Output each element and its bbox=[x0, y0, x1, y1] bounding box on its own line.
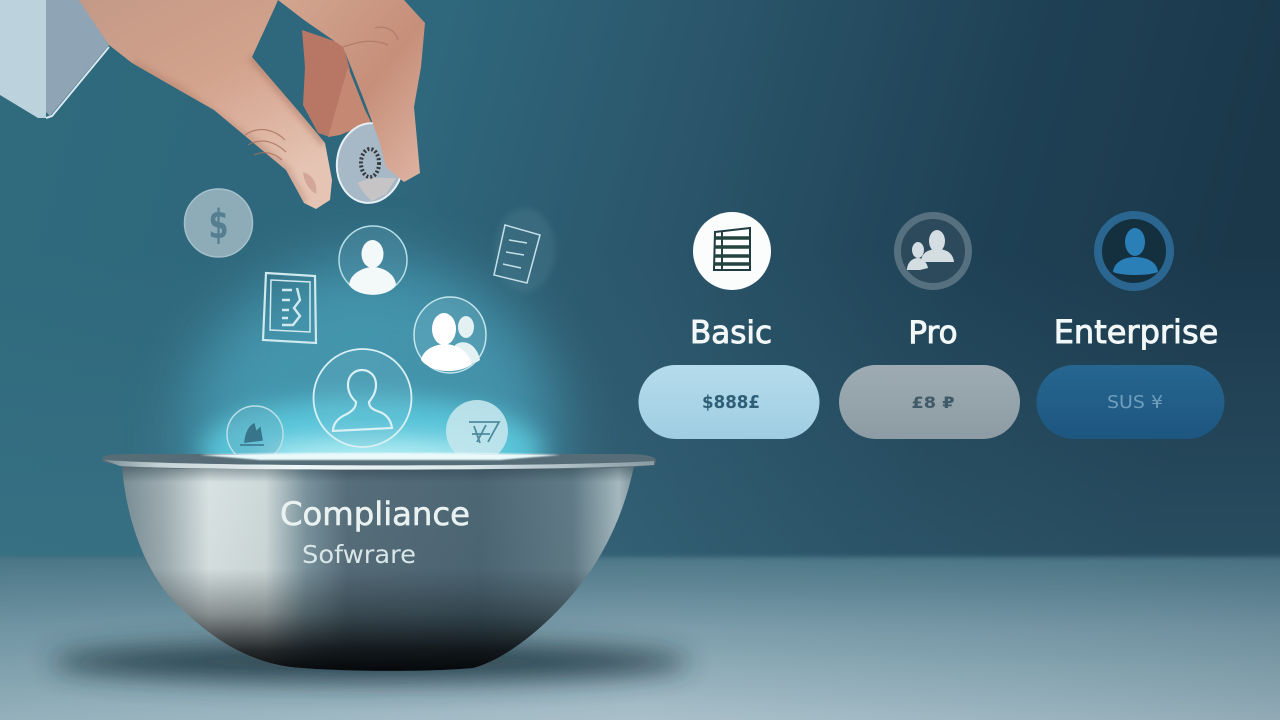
icon: large person outline in circle bbox=[314, 349, 412, 447]
icon: small filled circle, right bbox=[446, 400, 508, 454]
bowl label bbox=[280, 495, 470, 569]
heading: Enterprise: Enterprise bbox=[1054, 313, 1218, 351]
price pill: Basic: $888£ bbox=[702, 392, 760, 413]
back fingers bbox=[302, 30, 371, 137]
price pill: Pro bbox=[839, 365, 1020, 439]
index finger bbox=[278, 0, 425, 182]
icon: small circle, left bbox=[227, 406, 283, 462]
bowl label: Compliance bbox=[280, 495, 470, 533]
price pill: Enterprise: SUS ¥ bbox=[1107, 392, 1163, 413]
icon: white document badge bbox=[693, 212, 771, 290]
heading: Basic: Basic bbox=[690, 315, 772, 351]
bowl shadow on floor bbox=[50, 642, 690, 682]
price pill: Pro: £8 ₽ bbox=[912, 393, 954, 412]
light beam rising from the bowl bbox=[164, 237, 584, 454]
floor bbox=[0, 557, 1280, 720]
hand dropping a coin bbox=[0, 0, 425, 209]
icon: dollar coin bbox=[184, 189, 252, 257]
price pill: Basic bbox=[638, 365, 820, 439]
icon: person in circle bbox=[339, 226, 407, 295]
tier: Enterprise bbox=[1036, 215, 1224, 439]
heading: Pro: Pro bbox=[908, 315, 958, 351]
bowl label: Sofwrare bbox=[302, 540, 416, 569]
icon: blue person badge bbox=[1098, 215, 1170, 287]
coin held between fingers bbox=[332, 119, 408, 207]
thumb and palm bbox=[79, 0, 332, 209]
shirt cuff bbox=[0, 0, 109, 118]
icon: two people in circle bbox=[414, 297, 486, 373]
floating icons bbox=[184, 189, 555, 462]
tier: Pro bbox=[839, 216, 1020, 439]
steel bowl bbox=[102, 453, 656, 671]
pricing tiers bbox=[638, 212, 1224, 439]
icon: framed document bbox=[263, 273, 316, 343]
icon: dollar coin: $ bbox=[208, 202, 228, 248]
price pill: Enterprise bbox=[1036, 365, 1224, 439]
bowl rim bbox=[102, 453, 656, 470]
bowl body bbox=[122, 466, 634, 671]
tier: Basic bbox=[638, 212, 820, 439]
background wall bbox=[0, 0, 1280, 562]
icon: tilted document bbox=[494, 208, 555, 292]
icon: two people badge bbox=[898, 216, 968, 286]
